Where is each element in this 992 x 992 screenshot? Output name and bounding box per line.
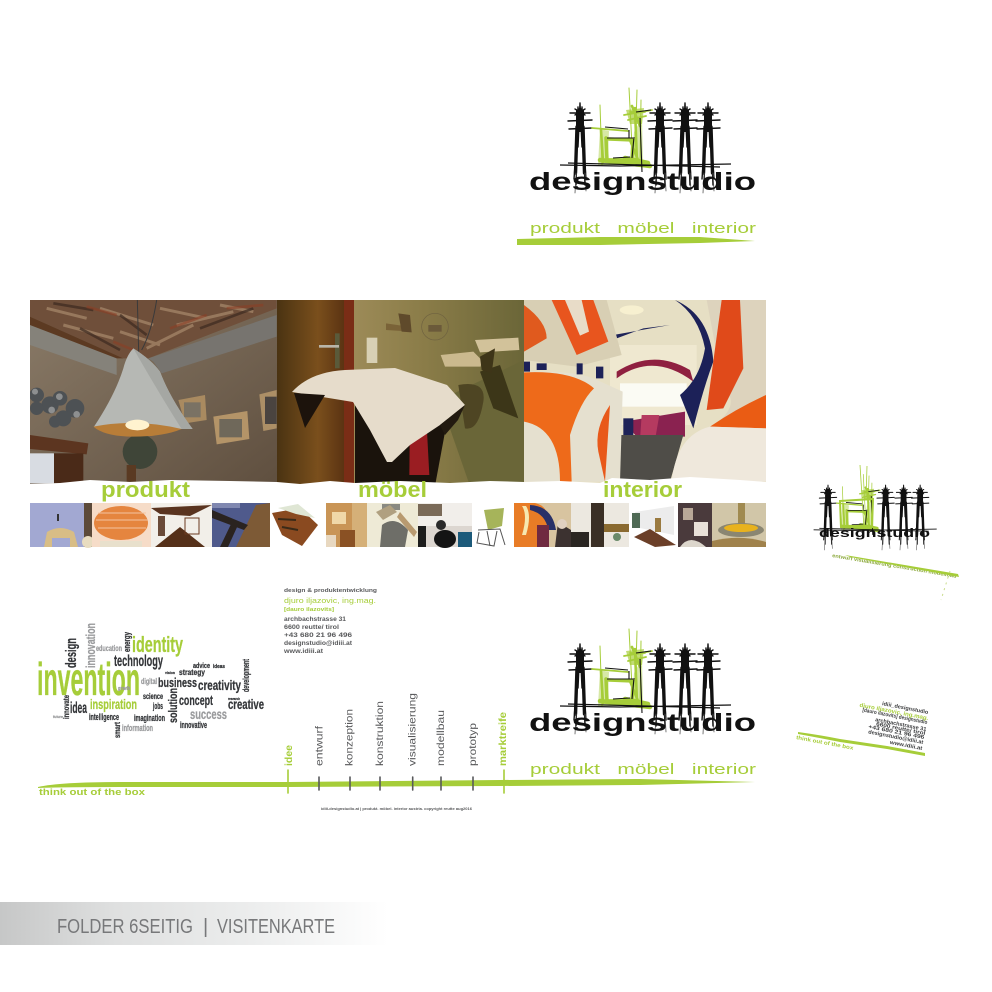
word cloud: growth	[118, 686, 130, 692]
business card back: www.idiii.at	[888, 740, 923, 752]
card tagline: entwurf visualisierung construction modellbau	[832, 553, 957, 580]
panel: photo produkt lamp	[29, 300, 277, 486]
business card back: 6600 reutte/ tirol	[876, 722, 926, 737]
timeline labels: entwurf	[315, 726, 326, 766]
business card front	[814, 465, 959, 600]
footer caption: |	[203, 916, 208, 938]
contact block: www.idiii.at	[283, 649, 323, 655]
word cloud	[37, 623, 264, 738]
business card back	[859, 701, 929, 752]
timeline ticks	[288, 770, 504, 793]
word cloud: education	[96, 644, 122, 653]
timeline labels: idee	[284, 745, 295, 766]
word cloud: development	[241, 659, 251, 692]
credits line: idiii-designstudio.at | produkt. möbel. interior austria. copyright reutte aug2016	[321, 806, 473, 811]
business card back: +43 680 21 96 496	[868, 724, 925, 741]
tagline: think out of the box: think out of the box	[39, 787, 146, 798]
logo: top designstudio	[517, 88, 756, 245]
word cloud: idea	[70, 700, 87, 717]
word cloud: strategy	[179, 668, 205, 677]
word cloud: inspiration	[90, 696, 137, 712]
word cloud: creative	[228, 696, 264, 712]
business card front: designstudio	[819, 526, 930, 540]
timeline labels: visualisierung	[408, 693, 419, 766]
word cloud: invention	[37, 653, 140, 705]
word cloud: vision	[165, 670, 175, 675]
tagline: produkt möbel interior: produkt möbel interior	[530, 220, 756, 237]
logo: bottom designstudio: designstudio	[529, 709, 756, 737]
word cloud: creativity	[198, 677, 241, 693]
word cloud: smart	[113, 722, 122, 738]
business card back: designstudio@idiii.at	[868, 729, 924, 746]
word cloud: intelligence	[89, 712, 119, 722]
word cloud: innovate	[62, 695, 71, 719]
word cloud: identity	[132, 632, 183, 657]
business card back: djuro iljazovic, ing.mag.	[859, 703, 929, 722]
timeline labels: marktreife	[498, 712, 509, 766]
business card back: idiii_designstudio	[881, 701, 929, 716]
footer caption: VISITENKARTE	[217, 916, 335, 938]
contact block: design & produktentwicklung	[284, 588, 378, 594]
torn paper edge	[30, 477, 766, 503]
contact block: [dauro ilazovits]	[284, 607, 334, 613]
word cloud: digital	[141, 677, 157, 686]
business card back: [dauro ilazovits] designstudio	[862, 707, 928, 726]
word cloud: energy	[122, 632, 132, 652]
word cloud: research	[228, 696, 240, 701]
word cloud: solution	[166, 688, 180, 723]
contact block	[283, 588, 378, 655]
timeline labels: modellbau	[436, 710, 447, 766]
word cloud: science	[143, 692, 163, 701]
word cloud: innovation	[83, 623, 98, 668]
process timeline line	[38, 693, 755, 798]
thumbnail strip	[30, 503, 766, 548]
word cloud: technology	[114, 653, 163, 670]
contact block: 6600 reutte/ tirol	[284, 625, 339, 631]
heading: möbel: möbel	[358, 477, 427, 502]
footer caption: FOLDER 6SEITIG	[57, 916, 193, 938]
contact block: designstudio@idiii.at	[284, 641, 352, 647]
word cloud: innovative	[180, 720, 207, 730]
panel: photo möbel sink	[277, 300, 524, 486]
word cloud: business	[158, 675, 197, 690]
word cloud: design	[63, 638, 80, 668]
word cloud: future	[53, 714, 64, 719]
word cloud: information	[122, 723, 153, 733]
timeline labels	[284, 693, 509, 766]
logo: top designstudio: designstudio	[529, 168, 756, 196]
card back tagline: think out of the box	[796, 735, 855, 752]
contact block: archbachstrasse 31	[284, 617, 347, 623]
card back swoosh and tagline	[796, 732, 925, 756]
word cloud: success	[190, 706, 227, 722]
tagline: bottom produkt möbel interior: produkt möbel interior	[530, 761, 756, 778]
panel: photo interior	[523, 300, 766, 486]
word cloud: jobs	[152, 701, 163, 711]
word cloud: concept	[179, 692, 213, 708]
logo: bottom designstudio	[529, 629, 756, 778]
timeline labels: konzeption	[345, 709, 356, 766]
timeline labels: prototyp	[468, 722, 479, 766]
word cloud: advice	[193, 663, 210, 670]
timeline labels: konstruktion	[375, 701, 386, 766]
word cloud: imagination	[134, 713, 165, 723]
contact block: djuro iljazovic, ing.mag.	[284, 596, 376, 605]
business card back: archbachstrasse 31	[875, 717, 927, 733]
contact block: +43 680 21 96 496	[284, 633, 353, 639]
word cloud: ideas	[213, 664, 225, 670]
heading: interior: interior	[603, 477, 682, 502]
heading: produkt: produkt	[101, 477, 191, 502]
footer band	[0, 902, 388, 945]
